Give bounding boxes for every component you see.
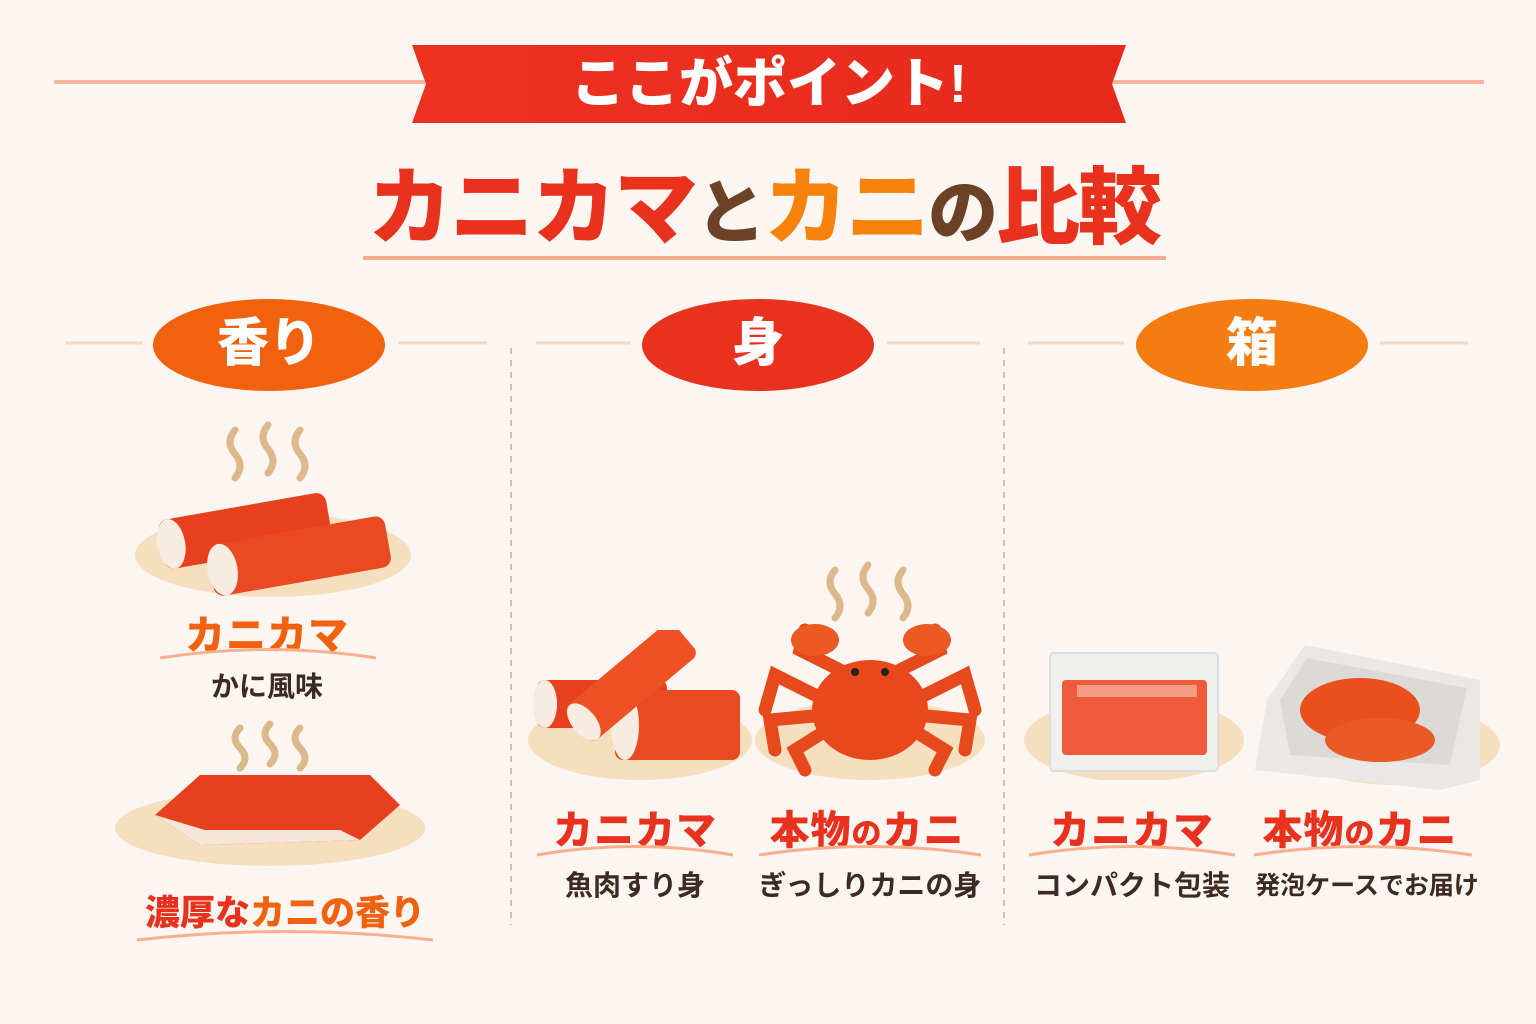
illustration: crab with steam [755,562,985,780]
ribbon banner: ここがポイント! [571,54,967,114]
label: カニカマ 魚肉すり身 [536,809,734,901]
title: カニカマとカニの比較 [368,161,1160,255]
label: カニカマ コンパクト包装: コンパクト包装 [1034,870,1230,901]
label: 本物のカニ 発泡ケースでお届け: 発泡ケースでお届け [1255,872,1479,900]
label: 濃厚なカニの香り: 濃厚なカニの香り [145,894,425,933]
label: 本物のカニ 発泡ケースでお届け: 本物のカニ [1262,809,1458,853]
label: カニカマ かに風味 [160,614,376,702]
label: カニカマ かに風味: カニカマ [185,614,349,658]
illustration: packaged crab stick [1024,652,1244,780]
pill: 箱: 箱 [1226,315,1278,373]
label: カニカマ かに風味: かに風味 [211,671,323,702]
pill: 香り: 香り [217,315,321,373]
label: 本物のカニ ぎっしりカニの身: 本物のカニ [770,809,964,853]
label: 本物のカニ ぎっしりカニの身 [758,809,982,901]
label: 本物のカニ 発泡ケースでお届け [1254,809,1479,900]
pill: 身: 身 [732,315,784,373]
label: カニカマ コンパクト包装: カニカマ [1050,809,1214,853]
illustration: crab sticks pile [528,630,752,780]
label: カニカマ コンパクト包装 [1028,809,1236,901]
pill: 香り [153,299,385,391]
pill: 箱 [1136,299,1368,391]
label: カニカマ 魚肉すり身: 魚肉すり身 [565,870,705,901]
illustration: styrofoam box with crabs [1255,645,1500,790]
illustration: real crab meat with steam [115,720,425,866]
ribbon banner [412,45,1126,123]
illustration: crab sticks with steam [135,422,411,597]
label: 本物のカニ ぎっしりカニの身: ぎっしりカニの身 [759,870,981,901]
label: カニカマ 魚肉すり身: カニカマ [553,809,717,853]
pill: 身 [642,299,874,391]
